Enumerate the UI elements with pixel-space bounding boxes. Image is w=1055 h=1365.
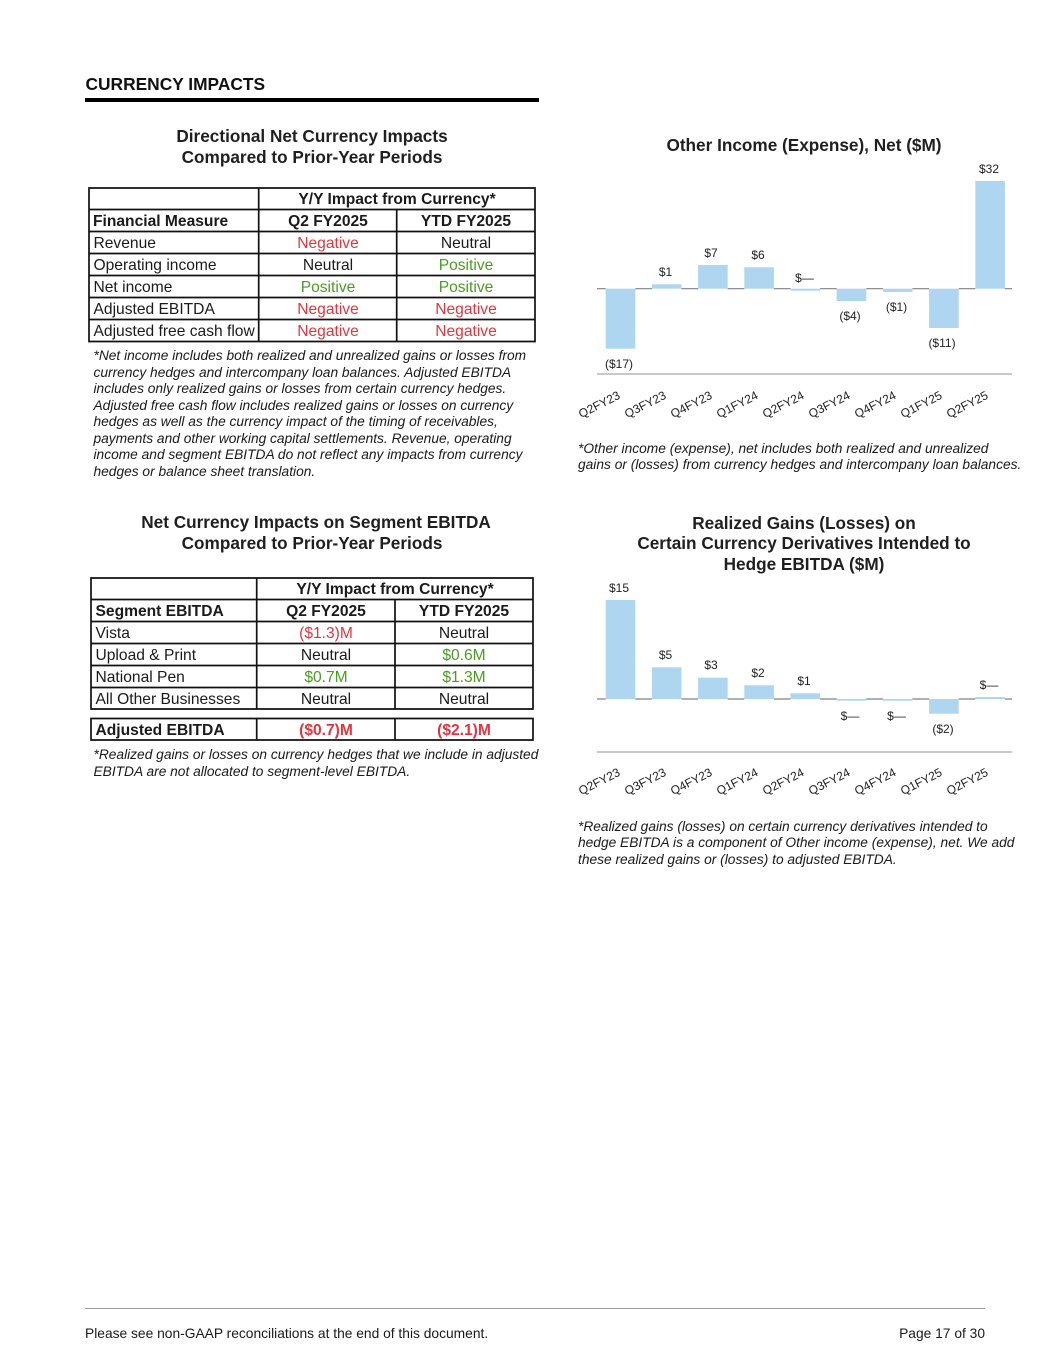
table: adjusted EBITDA total: ($0.7)M xyxy=(299,722,353,739)
bar chart: other income (expense): Q1FY25 xyxy=(898,388,945,421)
bar chart: realized gains (losses): Q3FY24 xyxy=(806,765,853,798)
footnote: other income xyxy=(578,441,1021,472)
footer: Page 17 of 30 xyxy=(899,1326,985,1341)
table: directional impacts: Negative xyxy=(297,323,359,340)
table: directional impacts: Positive xyxy=(301,279,355,296)
title: other income (expense): Other Income (Expense), Net ($M) xyxy=(666,135,942,155)
bar chart: other income (expense): Q2FY24 xyxy=(760,388,807,421)
title: realized gains (losses): Hedge EBITDA ($M) xyxy=(724,554,884,574)
table: directional impacts: Negative xyxy=(297,235,359,252)
bar chart: realized gains (losses): Q3FY23 xyxy=(622,765,669,798)
table: directional impacts: Q2 FY2025 xyxy=(288,213,368,230)
table: segment EBITDA impacts: Upload & Print xyxy=(96,647,197,664)
footnote: segment table xyxy=(94,747,540,779)
bar chart: other income (expense): $1 xyxy=(659,265,672,279)
bar chart: other income (expense): $— xyxy=(795,271,814,285)
title: directional net currency impacts xyxy=(176,126,448,167)
title: directional net currency impacts: Compared to Prior-Year Periods xyxy=(182,147,442,167)
table: segment EBITDA impacts: National Pen xyxy=(96,669,185,686)
table: segment EBITDA impacts: YTD FY2025 xyxy=(419,603,509,620)
footnote: directional table: payments and other working capital settlements. Revenue, operating xyxy=(92,431,512,446)
bar chart: other income (expense): Q3FY23 xyxy=(622,388,669,421)
table: directional impacts: Neutral xyxy=(441,235,491,252)
table: segment EBITDA impacts: Segment EBITDA xyxy=(96,603,224,620)
title: realized gains (losses) xyxy=(637,513,971,574)
table: directional impacts: Revenue xyxy=(94,235,156,252)
table: segment EBITDA impacts: Neutral xyxy=(301,647,351,664)
table: segment EBITDA impacts: Y/Y Impact from Currency* xyxy=(296,581,495,598)
table: adjusted EBITDA total: ($2.1)M xyxy=(437,722,491,739)
table: segment EBITDA impacts: $1.3M xyxy=(442,669,486,686)
bar chart: other income (expense): $7 xyxy=(704,246,718,260)
footnote: directional table: includes only realized gains or losses from certain currency hedges. xyxy=(94,381,506,396)
table: directional impacts: YTD FY2025 xyxy=(421,213,511,230)
footnote: directional table: hedges as well as the currency impact of the timing of receivables, xyxy=(94,414,498,429)
table: segment EBITDA impacts: Neutral xyxy=(301,691,351,708)
bar chart: other income (expense): Q4FY23 xyxy=(668,388,715,421)
bar chart: other income (expense): ($4) xyxy=(839,309,861,323)
bar chart: realized gains (losses): $2 xyxy=(751,666,765,680)
footnote: other income: *Other income (expense), net includes both realized and unrealized xyxy=(578,441,990,456)
bar chart: other income (expense): ($1) xyxy=(886,300,907,314)
bar chart: realized gains (losses): Q1FY25 xyxy=(898,765,945,798)
bar chart: realized gains (losses): Q4FY24 xyxy=(852,765,899,798)
table: segment EBITDA impacts: Vista xyxy=(96,625,130,642)
bar chart: realized gains (losses): $1 xyxy=(797,674,811,688)
title: realized gains (losses): Realized Gains (Losses) on xyxy=(692,513,916,533)
table: segment EBITDA impacts: $0.6M xyxy=(442,647,486,664)
title: realized gains (losses): Certain Currency Derivatives Intended to xyxy=(637,533,971,553)
table: adjusted EBITDA total xyxy=(91,718,533,740)
table: directional impacts: Operating income xyxy=(94,257,217,274)
bar chart: realized gains (losses): $— xyxy=(887,709,906,723)
title: directional net currency impacts: Directional Net Currency Impacts xyxy=(176,126,448,146)
table: directional impacts: Negative xyxy=(297,301,359,318)
bar chart: realized gains (losses): ($2) xyxy=(932,722,954,736)
bar chart: realized gains (losses): $3 xyxy=(704,658,718,672)
table: directional impacts: Neutral xyxy=(303,257,353,274)
bar chart: other income (expense): Q2FY23 xyxy=(576,388,623,421)
footnote: other income: gains or (losses) from currency hedges and intercompany loan balances. xyxy=(578,457,1021,472)
bar chart: other income (expense): Q1FY24 xyxy=(714,388,761,421)
bar chart: realized gains (losses): Q2FY23 xyxy=(576,765,623,798)
footnote: directional table: income and segment EBITDA do not reflect any impacts from currency xyxy=(94,447,524,462)
table: directional impacts: Positive xyxy=(439,279,493,296)
table: directional impacts: Financial Measure xyxy=(93,213,229,230)
table: directional impacts: Negative xyxy=(435,323,497,340)
section heading: CURRENCY IMPACTS xyxy=(86,74,265,94)
bar chart: realized gains (losses): $— xyxy=(841,709,859,723)
bar chart: realized gains (losses): $15 xyxy=(609,581,629,595)
title: net currency impacts on segment EBITDA: Net Currency Impacts on Segment EBITDA xyxy=(141,512,491,532)
footnote: directional table: currency hedges and intercompany loan balances. Adjusted EBITDA xyxy=(94,365,511,380)
table: directional impacts: Adjusted free cash flow xyxy=(94,323,255,340)
table: segment EBITDA impacts: Q2 FY2025 xyxy=(286,603,366,620)
table: adjusted EBITDA total: Adjusted EBITDA xyxy=(96,722,225,739)
footnote: realized gains: these realized gains or (losses) to adjusted EBITDA. xyxy=(578,852,897,867)
bar chart: realized gains (losses): Q2FY25 xyxy=(944,765,991,798)
table: segment EBITDA impacts xyxy=(91,578,533,709)
bar chart: other income (expense): Q3FY24 xyxy=(806,388,853,421)
bar chart: other income (expense): ($11) xyxy=(928,336,956,350)
table: directional impacts xyxy=(89,188,535,342)
bar chart: realized gains (losses) xyxy=(576,581,1012,798)
table: segment EBITDA impacts: $0.7M xyxy=(304,669,348,686)
footnote: directional table: Adjusted free cash flow includes realized gains or losses on currency xyxy=(92,398,514,413)
table: directional impacts: Net income xyxy=(94,279,172,296)
footer xyxy=(85,1308,985,1341)
table: directional impacts: Negative xyxy=(435,301,497,318)
bar chart: realized gains (losses): $— xyxy=(980,678,998,692)
footnote: segment table: EBITDA are not allocated to segment-level EBITDA. xyxy=(94,764,410,779)
bar chart: realized gains (losses): $5 xyxy=(659,648,672,662)
footer: Please see non-GAAP reconciliations at the end of this document. xyxy=(85,1326,488,1341)
footnote: directional table xyxy=(92,348,526,479)
bar chart: realized gains (losses): Q1FY24 xyxy=(714,765,761,798)
bar chart: other income (expense): $32 xyxy=(979,162,999,176)
bar chart: other income (expense): $6 xyxy=(751,248,765,262)
footnote: directional table: hedges or balance sheet translation. xyxy=(94,464,315,479)
bar chart: other income (expense) xyxy=(576,162,1012,421)
footnote: realized gains xyxy=(578,819,1016,867)
bar chart: other income (expense): ($17) xyxy=(605,357,633,371)
table: segment EBITDA impacts: Neutral xyxy=(439,625,489,642)
table: segment EBITDA impacts: ($1.3)M xyxy=(299,625,353,642)
bar chart: other income (expense): Q2FY25 xyxy=(944,388,991,421)
footnote: segment table: *Realized gains or losses on currency hedges that we include in adjusted xyxy=(94,747,540,762)
table: segment EBITDA impacts: All Other Businesses xyxy=(96,691,240,708)
title: net currency impacts on segment EBITDA: Compared to Prior-Year Periods xyxy=(182,533,442,553)
title: net currency impacts on segment EBITDA xyxy=(141,512,491,553)
table: segment EBITDA impacts: Neutral xyxy=(439,691,489,708)
table: directional impacts: Adjusted EBITDA xyxy=(94,301,215,318)
bar chart: other income (expense): Q4FY24 xyxy=(852,388,899,421)
section heading xyxy=(85,74,539,102)
bar chart: realized gains (losses): Q4FY23 xyxy=(668,765,715,798)
footnote: directional table: *Net income includes both realized and unrealized gains or losses from xyxy=(94,348,526,363)
footnote: realized gains: *Realized gains (losses) on certain currency derivatives intended to xyxy=(578,819,988,834)
table: directional impacts: Y/Y Impact from Currency* xyxy=(298,191,497,208)
table: directional impacts: Positive xyxy=(439,257,493,274)
bar chart: realized gains (losses): Q2FY24 xyxy=(760,765,807,798)
footnote: realized gains: hedge EBITDA is a component of Other income (expense), net. We add xyxy=(578,835,1016,850)
